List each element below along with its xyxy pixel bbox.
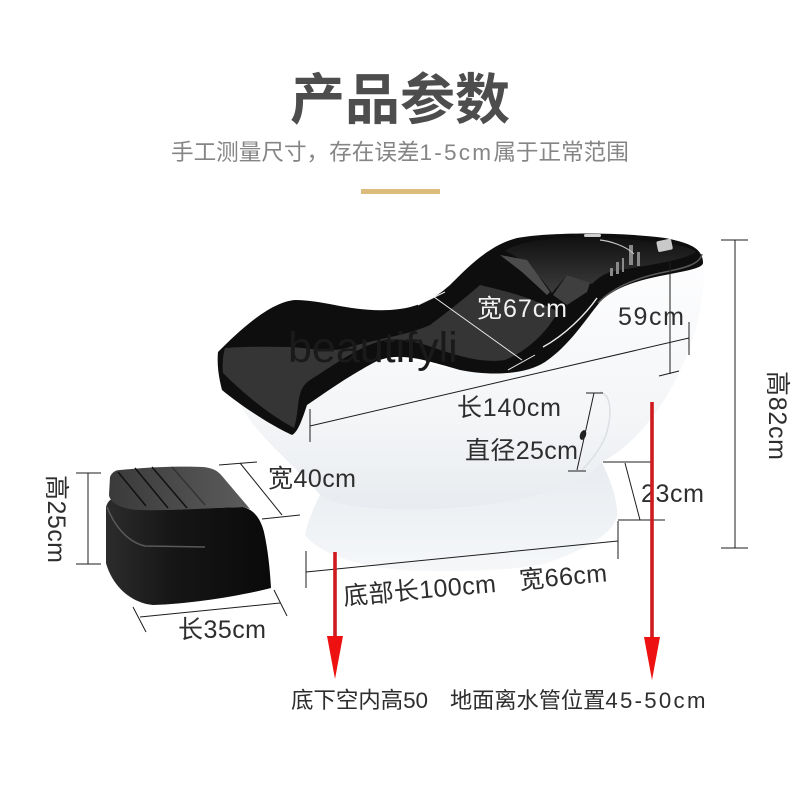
dimension: height 82 — [721, 240, 748, 548]
label: width 67: 宽67cm — [477, 295, 567, 323]
chair base — [305, 462, 617, 571]
labels — [42, 295, 791, 644]
title: 产品参数 — [290, 69, 510, 131]
chair neck rest — [553, 275, 590, 305]
chair basin recess — [505, 238, 696, 293]
watermark: beautifyli — [288, 324, 458, 372]
red arrow: under clearance — [327, 552, 343, 679]
label: stool width 40: 宽40cm — [268, 465, 356, 493]
footstool body — [106, 499, 271, 605]
dimension: 59 — [659, 262, 679, 376]
chair seat cushion — [223, 285, 558, 428]
chair white edge highlight — [543, 298, 597, 347]
chair basin rim highlight — [598, 254, 702, 303]
dimension: base 100 — [306, 521, 618, 588]
chair white bowl body — [240, 263, 704, 510]
pipe cutout — [582, 392, 610, 470]
label: stool length 35: 长35cm — [178, 616, 266, 644]
dimension: width 67 (white) — [418, 292, 535, 370]
footstool — [106, 467, 271, 605]
shampoo chair — [218, 234, 704, 571]
chair drain highlight — [584, 234, 601, 237]
subtitle: 手工测量尺寸，存在误差1-5cm属于正常范围 — [171, 140, 629, 165]
dimension: stool width 40 — [219, 462, 300, 519]
label: base length 100: 底部长100cm — [342, 570, 497, 611]
label: width 66: 宽66cm — [518, 559, 608, 595]
dimension: diameter 25 — [568, 393, 603, 471]
pipe hole — [578, 429, 588, 441]
dimension: 23 — [603, 462, 665, 520]
note: pipe height: 地面离水管位置45-50cm — [450, 688, 708, 713]
dimension: length 140 — [310, 322, 689, 442]
label: length 140: 长140cm — [457, 394, 561, 422]
footstool seam — [107, 507, 205, 547]
dimension: stool length 35 — [133, 590, 287, 632]
chair faucet chrome handle — [656, 238, 673, 252]
label: height 82: 高82cm — [763, 371, 791, 460]
gold divider bar — [361, 189, 440, 194]
chair faucet — [600, 240, 640, 276]
footstool ridges — [118, 467, 205, 508]
footstool top — [109, 467, 250, 510]
chair backrest fold — [500, 255, 550, 295]
note: under clearance: 底下空内高50 — [291, 688, 428, 713]
chair black top shell — [218, 234, 703, 435]
label: diameter 25: 直径25cm — [465, 437, 578, 465]
label: 23: 23cm — [641, 480, 704, 508]
dimension lines — [76, 240, 748, 632]
red arrow: pipe height — [644, 402, 660, 680]
label: 59: 59cm — [618, 303, 684, 331]
label: stool height 25: 高25cm — [42, 475, 70, 563]
dimension: stool height 25 — [76, 473, 101, 564]
